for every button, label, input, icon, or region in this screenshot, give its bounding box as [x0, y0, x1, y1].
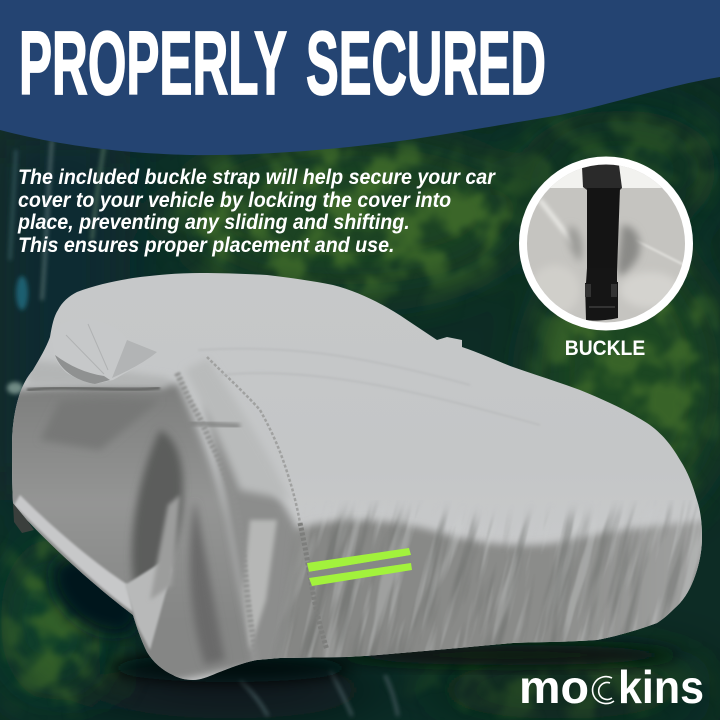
- logo: mockins: mo: [519, 661, 589, 713]
- side mirror pocket: [52, 319, 157, 384]
- seams: [177, 373, 257, 658]
- side folds: [25, 360, 225, 665]
- logo crescent: [593, 677, 614, 704]
- front bumper shade: [280, 520, 710, 670]
- logo: mockins: kins: [618, 661, 704, 713]
- rear side panel: [0, 384, 258, 690]
- between seams panel: [204, 410, 311, 661]
- intro text: place, preventing any sliding and shifting.: [18, 211, 410, 234]
- inset ring: [519, 156, 693, 330]
- buckle inset: [519, 150, 695, 340]
- header banner: [0, 0, 720, 155]
- car under silver cover: [0, 260, 720, 690]
- reflective strips: [307, 548, 412, 586]
- top of seam panel highlight: [190, 362, 284, 500]
- rear wheel: [13, 503, 34, 533]
- hood and roof: [12, 260, 710, 680]
- intro text: [18, 166, 496, 257]
- title: PROPERLY: [19, 14, 287, 114]
- strap: [582, 164, 622, 190]
- intro text: This ensures proper placement and use.: [18, 234, 394, 257]
- cover fabric: [0, 260, 720, 690]
- hood lines: [224, 374, 228, 376]
- logo: mockins: [519, 661, 704, 713]
- plastic buckle: [585, 268, 618, 321]
- buckle label: BUCKLE: [565, 337, 645, 360]
- reflective panels: [243, 520, 277, 650]
- intro text: cover to your vehicle by locking the cover into: [18, 189, 451, 212]
- intro text: The included buckle strap will help secure your car: [18, 166, 495, 189]
- front fold streaks: [284, 504, 702, 658]
